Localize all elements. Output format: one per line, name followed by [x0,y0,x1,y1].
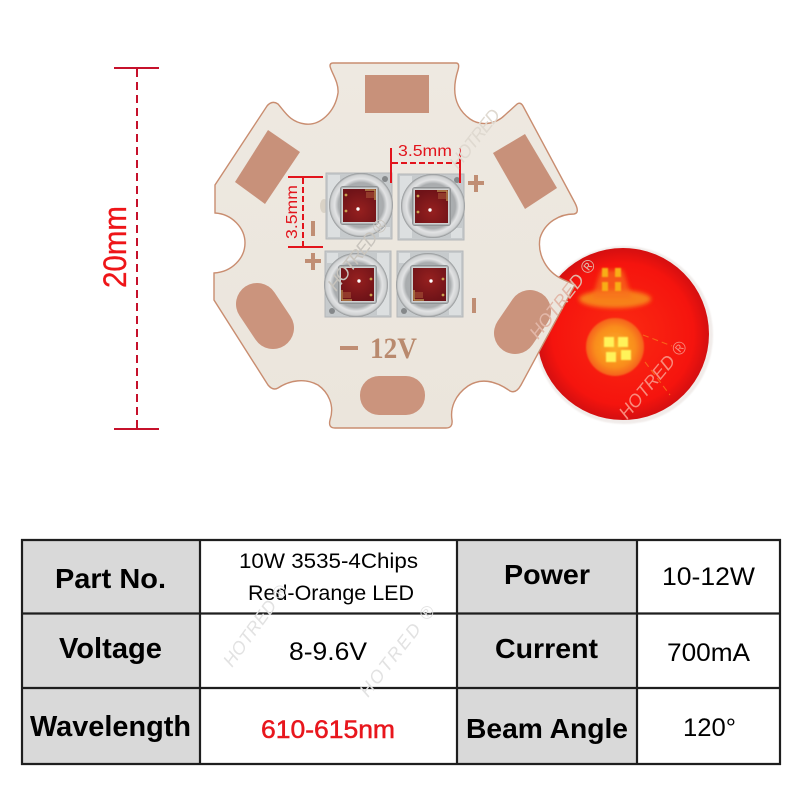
polarity marks [305,175,484,350]
row: Voltage / Current: 8-9.6V [289,638,367,666]
row: Wavelength / Beam Angle: 610-615nm [261,716,395,744]
photo: lit red LED in circle [535,246,713,424]
row: Voltage / Current [59,633,750,667]
dimension: 3.5mm horizontal [391,143,460,183]
dimension: 20mm board height: 20mm [97,206,133,288]
watermarks: HOTRED ® [615,336,692,423]
row: Part No / Power: Part No. [55,563,166,594]
row: Part No / Power: Red-Orange LED [248,582,414,605]
LED: bottom left [324,251,391,317]
copper pad: upper right [493,134,557,209]
LED: bottom right [396,251,463,317]
row: Wavelength / Beam Angle [30,711,736,744]
copper pad: top [365,75,429,113]
row: Voltage / Current: Voltage [59,633,162,665]
LED star board [214,63,577,428]
table grid [21,539,781,765]
watermarks: HOTRED ® [219,580,292,670]
dimension: 3.5mm horizontal: 3.5mm [398,143,452,160]
watermarks: HOTRED ® [323,215,392,294]
copper pad: lower left [257,304,273,328]
watermarks [219,105,692,700]
LED: top right [398,174,465,240]
dimension: 3.5mm vertical [284,177,323,247]
label: 12V: 12V [370,332,417,365]
row: Wavelength / Beam Angle: Wavelength [30,711,191,743]
row: Wavelength / Beam Angle: 120° [683,714,736,742]
row: Wavelength / Beam Angle: Beam Angle [466,713,628,744]
row: Voltage / Current: 700mA [667,639,750,667]
row: Part No / Power: 10W 3535-4Chips [239,550,418,573]
spec table [21,539,781,765]
dimension: 20mm board height [97,68,159,429]
row: Part No / Power: Power [504,559,590,590]
copper pad: bottom [360,376,425,415]
watermarks: HOTRED [445,105,504,172]
row: Voltage / Current: Current [495,633,598,664]
watermarks: HOTRED ® [355,601,439,700]
dimension: 3.5mm vertical: 3.5mm [284,185,301,239]
row: Part No / Power [55,550,755,605]
copper pad: lower right [515,311,530,333]
header cell backgrounds [21,540,637,764]
watermarks: HOTRED ® [525,255,600,342]
LED: top left [326,173,393,239]
row: Part No / Power: 10-12W [662,563,755,591]
LED chips [320,173,465,317]
copper pad: upper left [235,130,300,204]
